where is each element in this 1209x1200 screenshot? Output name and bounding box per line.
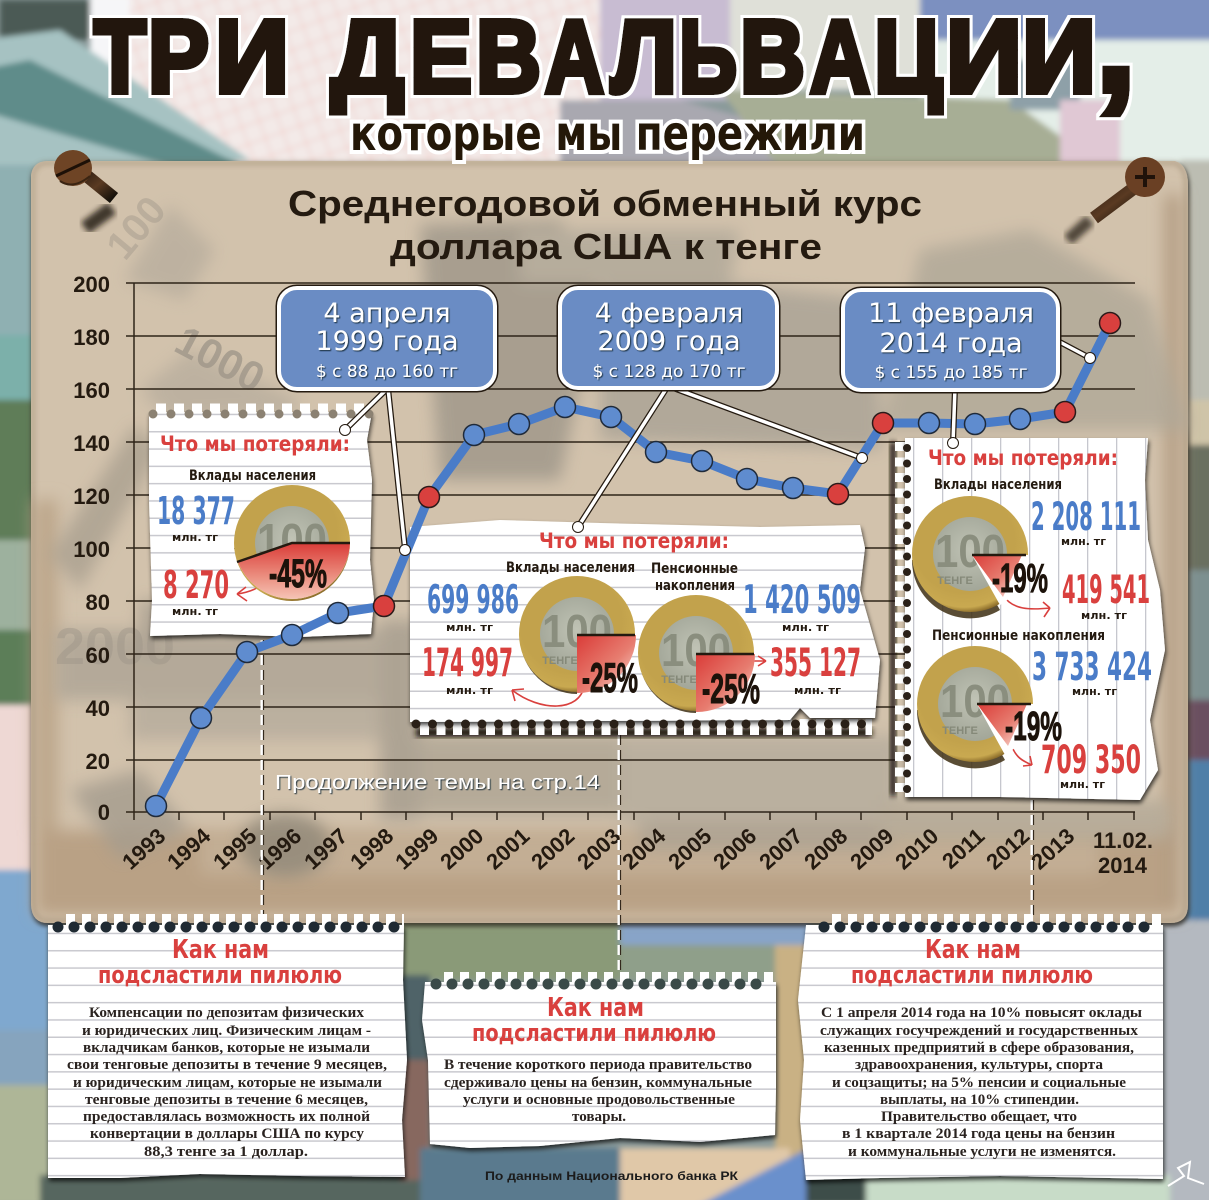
- x axis year labels: 2010: [890, 823, 943, 874]
- title: Ц: [874, 0, 942, 114]
- exchange rate line chart: [146, 312, 1120, 816]
- coin pie -25% pensions: 100: [661, 624, 731, 676]
- card: sweetened pill right: и коммунальные услуги не изменятся.: [848, 1144, 1116, 1160]
- nail: left: [54, 150, 114, 228]
- card: sweetened pill left: подсластили пилюлю: [98, 961, 342, 989]
- x axis year labels: 2012: [981, 823, 1034, 874]
- x axis year labels: 2009: [845, 823, 898, 874]
- title: И: [1022, 0, 1096, 114]
- paper mottling and burned edges: [33, 163, 1186, 921]
- coin pie -19% pensions: 100: [940, 675, 1010, 727]
- coin pie -25% pensions: [638, 595, 760, 713]
- watermark banknotes on paper: 100: [98, 188, 175, 268]
- watermark banknotes on paper: 1000: [168, 316, 272, 402]
- loss note 2009: 174 997: [422, 641, 513, 686]
- x axis year labels: 2007: [754, 823, 807, 874]
- callout: 2009: [560, 288, 777, 388]
- loss note 2014: Что мы потеряли:: [928, 446, 1118, 470]
- x axis year labels: 1994: [162, 823, 216, 874]
- x axis year labels: 2014: [1098, 853, 1148, 878]
- callout: 1999: $ с 88 до 160 тг: [316, 362, 458, 382]
- y axis labels: 100: [73, 537, 110, 562]
- loss note 1999: 18 377: [157, 489, 235, 533]
- callout: 1999: 1999 года: [315, 326, 459, 357]
- x axis year labels: 1999: [390, 823, 443, 874]
- x axis year labels: 1993: [117, 823, 170, 874]
- x axis year labels: 2006: [708, 823, 761, 874]
- card: sweetened pill right: С 1 апреля 2014 года на 10% повысят оклады: [821, 1005, 1142, 1021]
- y axis labels: 200: [73, 272, 110, 297]
- x axis year labels: 2008: [799, 823, 852, 874]
- card: sweetened pill left: свои тенговые депозиты в течение 9 месяцев,: [67, 1057, 387, 1073]
- loss note 2014: [890, 438, 1165, 800]
- coin pie -25% pensions: -25%: [702, 665, 760, 712]
- coin pie -45%: 100: [257, 514, 327, 566]
- card: sweetened pill left: и юридических лиц. Физическим лицам -: [82, 1023, 371, 1039]
- callout: 1999: [279, 288, 495, 389]
- callout: 2014: 2014 года: [879, 328, 1023, 359]
- card: sweetened pill left: предоставлялась возможность их полной: [83, 1109, 370, 1125]
- loss note 1999: Вклады населения: [189, 468, 316, 484]
- y axis labels: 0: [98, 800, 110, 825]
- callout: 2009: 2009 года: [597, 326, 741, 357]
- x axis year labels: 2004: [617, 823, 671, 874]
- x axis year labels: 2002: [526, 823, 579, 874]
- title: И: [946, 0, 1022, 114]
- loss note 2014: млн. тг: [1072, 685, 1117, 698]
- y axis labels: 160: [73, 378, 110, 403]
- artist signature: [1168, 1162, 1204, 1186]
- title: Е: [410, 0, 472, 114]
- card: sweetened pill right: казенных предприятий в сфере образования,: [824, 1040, 1134, 1056]
- card: sweetened pill left: Как нам: [172, 935, 269, 965]
- nail: right: [1068, 157, 1165, 240]
- note text: continuation: Продолжение темы на стр.14: [275, 772, 600, 794]
- loss note 2009: 355 127: [770, 641, 861, 686]
- loss note 2009: млн. тг: [446, 621, 493, 634]
- y axis labels: [73, 272, 110, 825]
- card: sweetened pill right: Как нам: [925, 935, 1021, 965]
- loss note 2009: [410, 520, 880, 737]
- coin pie -25% deposits: 100: [542, 605, 612, 657]
- loss note 2014: Пенсионные накопления: [932, 628, 1105, 644]
- perforation: [66, 914, 404, 926]
- loss note 2009: Вклады населения: [506, 560, 635, 576]
- x axis year labels: 1995: [208, 823, 261, 874]
- card: sweetened pill middle: подсластили пилюлю: [472, 1019, 716, 1047]
- watermark banknotes on paper: 2000: [55, 618, 175, 676]
- loss note 1999: млн. тг: [172, 605, 218, 618]
- coin pie -19% deposits: 100: [935, 525, 1005, 577]
- heading: what we lost: Что мы потеряли:: [160, 432, 350, 456]
- x axis year labels: 2005: [663, 823, 716, 874]
- title: В: [740, 0, 805, 114]
- subtitle: которые мы пережили: [350, 106, 865, 162]
- loss note 2009: 1 420 509: [743, 578, 861, 623]
- title: А: [810, 0, 870, 114]
- card: sweetened pill left: тенговые депозиты в течение 6 месяцев,: [85, 1092, 368, 1108]
- title: Т: [94, 0, 146, 114]
- loss note 2009: 699 986: [427, 578, 519, 623]
- card: sweetened pill left: и юридическим лицам, которые не изымали: [73, 1075, 382, 1091]
- watermark banknotes on paper: [50, 188, 1190, 877]
- coin pie -25% deposits: ТЕНГЕ: [542, 655, 578, 667]
- source note: По данным Национального банка РК: [485, 1171, 739, 1183]
- loss note 2009: млн. тг: [794, 684, 841, 697]
- card: sweetened pill right: здравоохранения, культуры, спорта: [855, 1057, 1103, 1073]
- loss note 1999: [149, 408, 374, 637]
- callout leader lines: [340, 340, 1096, 556]
- coin pie -19% deposits: -19%: [992, 555, 1048, 601]
- loss note 2009: Пенсионные: [651, 561, 738, 577]
- loss note 2014: млн. тг: [1081, 609, 1127, 622]
- x axis year labels: 2001: [481, 823, 534, 874]
- y axis labels: 120: [73, 484, 110, 509]
- loss note 1999: 8 270: [163, 563, 229, 607]
- callout: 2014: 11 февраля: [868, 298, 1034, 329]
- card: sweetened pill middle: Как нам: [547, 993, 644, 1023]
- loss note 2014: 709 350: [1041, 738, 1141, 783]
- title: [94, 0, 1137, 123]
- title: Р: [148, 0, 209, 114]
- x axis year labels: 2013: [1026, 823, 1079, 874]
- x axis year labels: [117, 823, 1153, 878]
- chart heading: [288, 183, 922, 267]
- loss note 2014: Вклады населения: [934, 477, 1062, 493]
- card: sweetened pill right: в 1 квартале 2014 года цены на бензин: [842, 1126, 1115, 1142]
- coin pie -45%: [234, 485, 350, 601]
- card: sweetened pill left: Компенсации по депозитам физических: [89, 1005, 364, 1021]
- card: sweetened pill right: выплаты, на 10% стипендии.: [880, 1092, 1079, 1108]
- card: sweetened pill middle: товары.: [572, 1109, 626, 1125]
- card: sweetened pill right: подсластили пилюлю: [851, 961, 1093, 989]
- card: sweetened pill right: и соцзащиты; на 5% пенсии и социальные: [832, 1075, 1126, 1091]
- y axis labels: 20: [86, 749, 110, 774]
- y axis labels: 60: [86, 643, 110, 668]
- chart grid and axes: [126, 283, 1135, 820]
- loss note 2014: млн. тг: [1061, 535, 1106, 548]
- coin pie -25% pensions: ТЕНГЕ: [661, 674, 697, 686]
- card: sweetened pill middle: [422, 978, 776, 1148]
- loss note 2009: Что мы потеряли:: [539, 529, 729, 553]
- callout: 2009: 4 февраля: [595, 298, 743, 329]
- card: sweetened pill left: 88,3 тенге за 1 доллар.: [144, 1144, 308, 1160]
- dashed connectors to cards: [262, 640, 1034, 975]
- x axis year labels: 11.02.: [1093, 828, 1153, 853]
- card: sweetened pill right: [798, 920, 1163, 1180]
- card: sweetened pill middle: услуги и основные продовольственные: [463, 1092, 735, 1108]
- x axis year labels: 1996: [253, 823, 306, 874]
- coin pie -19% deposits: ТЕНГЕ: [937, 575, 973, 587]
- title: Л: [611, 0, 677, 114]
- title: Д: [331, 0, 404, 114]
- coin pie -25% deposits: [519, 576, 638, 701]
- card: sweetened pill right: служащих госучреждений и государственных: [820, 1023, 1139, 1039]
- coin pie -19% deposits: [912, 496, 1048, 618]
- card: sweetened pill middle: сдерживало цены на бензин, коммунальные: [444, 1075, 752, 1091]
- title: И: [215, 0, 289, 114]
- chart heading: Среднегодовой обменный курс: [288, 183, 922, 224]
- coin pie -19% pensions: -19%: [1005, 703, 1062, 749]
- spiral binding: [903, 448, 911, 796]
- perforated lower edge: [416, 728, 872, 737]
- card: sweetened pill left: [48, 920, 407, 1178]
- x axis year labels: 2003: [572, 823, 625, 874]
- title: Ь: [679, 0, 737, 114]
- callout: 2009: $ с 128 до 170 тг: [592, 362, 746, 382]
- coin pie -19% pensions: ТЕНГЕ: [942, 725, 978, 737]
- coin pie -19% pensions: [917, 646, 1062, 768]
- x axis year labels: 2000: [435, 823, 488, 874]
- x axis year labels: 2011: [937, 823, 989, 874]
- card: sweetened pill middle: В течение короткого периода правительство: [444, 1057, 752, 1073]
- callout: 2014: $ с 155 до 185 тг: [874, 363, 1028, 383]
- callout: 1999: 4 апреля: [323, 298, 451, 329]
- coin pie -45%: -45%: [269, 552, 327, 596]
- loss note 2009: млн. тг: [782, 621, 829, 634]
- chart paper panel: [31, 161, 1188, 923]
- loss note 1999: млн. тг: [172, 531, 218, 544]
- title: В: [476, 0, 541, 114]
- y axis labels: 80: [86, 590, 110, 615]
- y axis labels: 140: [73, 431, 110, 456]
- loss note 2009: млн. тг: [446, 684, 493, 697]
- chart heading: доллара США к тенге: [390, 226, 822, 267]
- loss note 2009: накопления: [655, 578, 735, 594]
- card: sweetened pill right: Правительство обещает, что: [881, 1109, 1077, 1125]
- x axis year labels: 1998: [345, 823, 398, 874]
- y axis labels: 40: [86, 696, 110, 721]
- card: sweetened pill left: конвертации в доллары США по курсу: [90, 1126, 365, 1142]
- loss note 2014: млн. тг: [1060, 778, 1105, 791]
- coin pie -25% deposits: -25%: [582, 654, 638, 701]
- title: А: [545, 0, 604, 114]
- x axis year labels: 1997: [299, 823, 352, 874]
- y axis labels: 180: [73, 325, 110, 350]
- card: sweetened pill left: вкладчикам банков, которые не изымали: [83, 1040, 370, 1056]
- callout: 2014: [843, 290, 1058, 390]
